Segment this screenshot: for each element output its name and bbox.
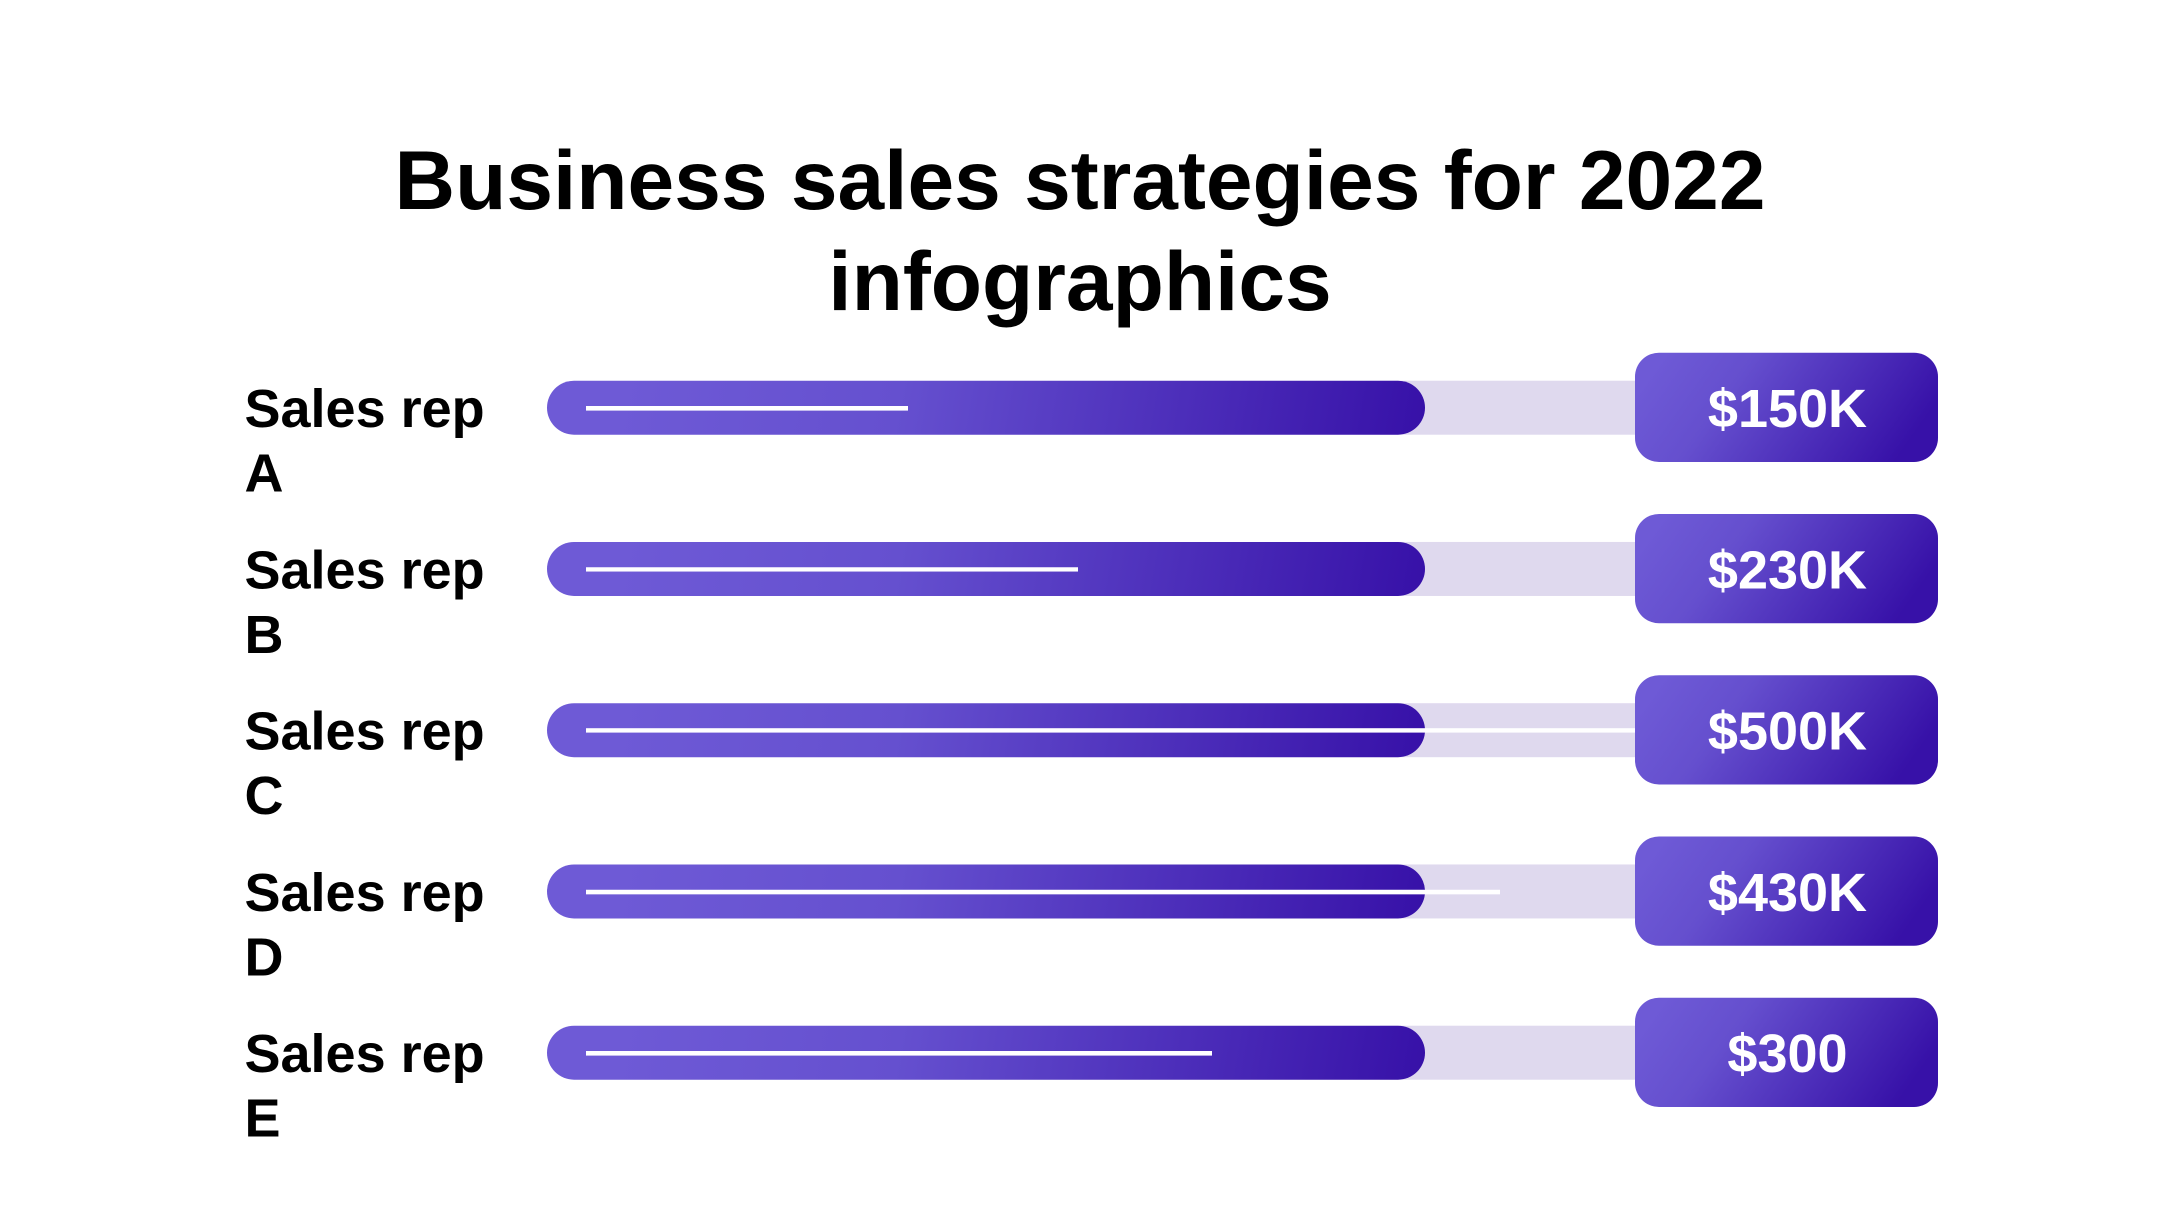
value badge	[1635, 675, 1938, 784]
title: Business sales strategies for 2022	[395, 133, 1765, 227]
title	[395, 133, 1765, 328]
label: Sales rep C: C	[244, 766, 284, 826]
row: Sales rep A	[244, 353, 1938, 504]
value line	[586, 567, 1078, 572]
value badge	[1635, 998, 1938, 1107]
label: Sales rep A: Sales rep	[244, 379, 485, 439]
value badge: $150K	[1708, 379, 1867, 439]
value line	[586, 1051, 1212, 1056]
bar fill	[547, 1026, 1425, 1080]
title: infographics	[828, 234, 1332, 328]
label: Sales rep D: D	[244, 927, 284, 987]
value badge	[1635, 514, 1938, 623]
row: Sales rep B	[244, 514, 1938, 665]
row: Sales rep D	[244, 836, 1938, 987]
bar track	[1380, 864, 1642, 918]
value line	[586, 406, 908, 411]
value badge: $300	[1727, 1024, 1848, 1084]
bar track	[1380, 1026, 1642, 1080]
bar fill	[547, 381, 1425, 435]
label: Sales rep A: A	[244, 444, 284, 504]
label: Sales rep D: Sales rep	[244, 863, 485, 923]
value line	[586, 890, 1500, 894]
label: Sales rep B: Sales rep	[244, 540, 485, 600]
value badge	[1635, 353, 1938, 462]
value badge: $500K	[1708, 702, 1867, 762]
value badge	[1635, 836, 1938, 946]
bar track	[1380, 703, 1642, 757]
bar fill	[547, 703, 1425, 757]
label: Sales rep E: E	[244, 1088, 281, 1148]
label: Sales rep B: B	[244, 605, 284, 665]
value badge: $230K	[1708, 540, 1867, 600]
bar fill	[547, 864, 1425, 918]
value line	[586, 728, 1638, 733]
label: Sales rep C: Sales rep	[244, 702, 485, 762]
label: Sales rep E: Sales rep	[244, 1024, 485, 1084]
bar track	[1380, 381, 1642, 435]
bar track	[1380, 542, 1642, 596]
row: Sales rep C	[244, 675, 1938, 826]
bar fill	[547, 542, 1425, 596]
row: Sales rep E	[244, 998, 1938, 1148]
value badge: $430K	[1708, 863, 1867, 923]
